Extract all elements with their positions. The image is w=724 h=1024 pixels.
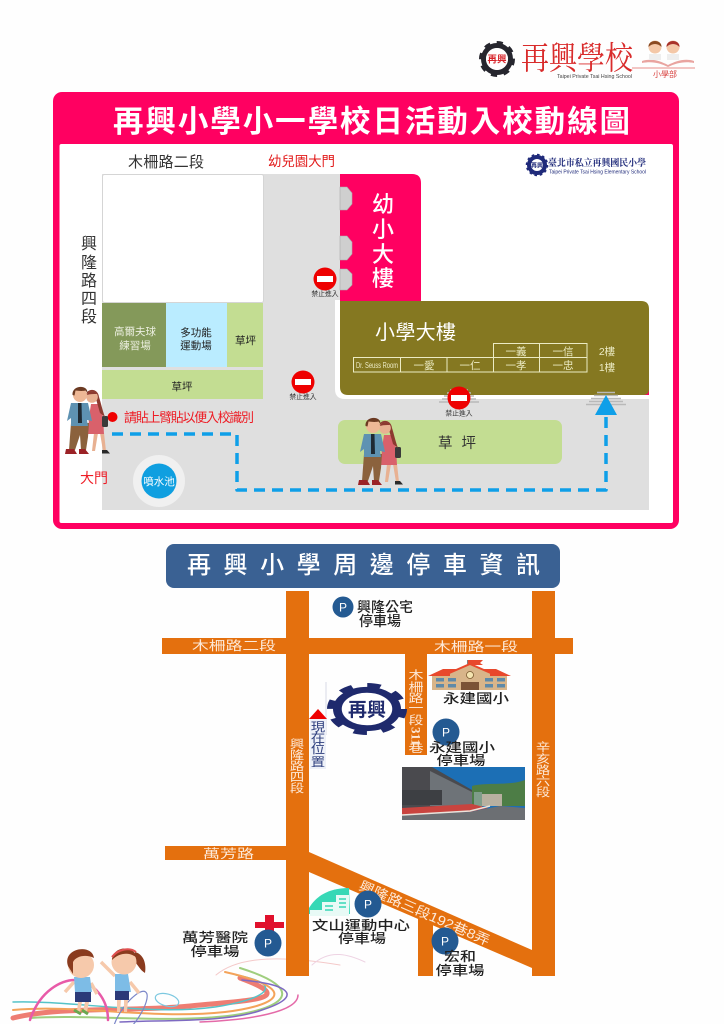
classroom labels: Dr. Seuss Room bbox=[356, 361, 398, 370]
icon: Wenshan sports center building bbox=[309, 888, 350, 916]
red bullet note: 請貼上臂貼以便入校識別 bbox=[124, 410, 254, 425]
school seal and name: 臺北市私立再興國民小學 bbox=[548, 157, 646, 169]
road label: lane 311 vertical: 木柵路一段 bbox=[409, 669, 423, 727]
classroom labels: 一信 bbox=[552, 346, 574, 358]
road: Xinglong Road diagonal lane bbox=[309, 852, 532, 968]
parking: Yongjian elementary bbox=[429, 718, 495, 768]
classroom table bbox=[354, 344, 587, 372]
classroom labels: 一愛 bbox=[414, 359, 434, 372]
icon: gear logo bbox=[481, 43, 513, 75]
classroom labels: 一仁 bbox=[460, 360, 480, 372]
parking: Honghe: P bbox=[441, 934, 449, 948]
people at gate bbox=[65, 387, 110, 454]
department label: 小學部 bbox=[653, 69, 677, 79]
main gate label: 大門 bbox=[80, 470, 108, 486]
current location marker: 現在位置 bbox=[311, 720, 325, 769]
parking: Wenshan sports center bbox=[312, 890, 410, 946]
road: Xinhai Road sec 6 bbox=[532, 591, 555, 976]
parking: Wanfang hospital bbox=[182, 930, 282, 959]
parking: Wenshan sports center: P bbox=[364, 898, 372, 912]
icon: elementary school building bbox=[428, 660, 511, 690]
stairs: front door bbox=[439, 390, 479, 402]
parking: Wanfang hospital: P bbox=[264, 936, 272, 950]
no entry sign 3 bbox=[445, 386, 473, 418]
no entry sign 1 bbox=[311, 268, 339, 298]
white walkway around building bbox=[335, 300, 649, 399]
parking: Wenshan sports center: 文山運動中心 bbox=[312, 918, 410, 933]
road: Xinglong Road sec 4 bbox=[286, 591, 309, 976]
parking street map bbox=[162, 591, 573, 978]
lawn front: 草坪 bbox=[438, 435, 476, 452]
school seal and name: Taipei Private Tsai Hsing Elementary School bbox=[549, 170, 646, 176]
lawn small bbox=[227, 303, 263, 367]
no entry sign 2: 禁止進入 bbox=[289, 392, 317, 401]
lawn wide bbox=[102, 370, 263, 399]
current location marker bbox=[309, 682, 327, 769]
English school name: Taipei Private Tsai Hsing School bbox=[557, 74, 632, 80]
lawn small: 草坪 bbox=[235, 334, 256, 347]
school seal and name bbox=[527, 155, 646, 176]
campus ground bbox=[102, 174, 649, 510]
icon: Tsai Hsing gear logo: 再興 bbox=[348, 699, 386, 721]
kindergarten building bbox=[340, 174, 421, 302]
road label: Muzha Road sec 2: 木柵路二段 bbox=[128, 154, 204, 171]
school seal and name: 再興 bbox=[531, 162, 543, 170]
road label: Muzha Road sec 2: 木柵路二段 bbox=[192, 638, 276, 653]
boy bbox=[65, 949, 97, 1014]
panel interior bbox=[60, 144, 673, 523]
fountain: 噴水池 bbox=[143, 475, 175, 488]
parking: Yongjian elementary: 永建國小 bbox=[429, 740, 495, 755]
classroom labels: 一義 bbox=[506, 345, 527, 358]
parking: Xinglong public housing bbox=[332, 596, 413, 629]
sports: golf practice bbox=[102, 303, 166, 367]
parking: Xinglong public housing: 停車場 bbox=[359, 613, 401, 629]
road label: Xinglong Road sec 4: 興隆路四段 bbox=[81, 235, 97, 326]
sports: golf practice: 高爾夫球 bbox=[114, 325, 156, 338]
route dashed line bbox=[112, 416, 606, 490]
ribbon bbox=[13, 954, 365, 1024]
sports: multipurpose court: 多功能 bbox=[180, 326, 212, 339]
classroom labels: 一孝 bbox=[506, 360, 526, 372]
parking: Honghe: 停車場 bbox=[436, 963, 484, 978]
hoops bbox=[30, 980, 108, 1020]
parking: Honghe bbox=[432, 928, 484, 978]
decorative ribbon and children bbox=[13, 948, 365, 1024]
stairs: entrance bbox=[586, 392, 626, 404]
road: branch lane bbox=[418, 915, 433, 976]
parking: Wenshan sports center: 停車場 bbox=[338, 931, 386, 946]
road: Wanfang Road bbox=[165, 846, 286, 860]
primary building name: 小學大樓 bbox=[375, 321, 456, 344]
road label: lane 311 vertical bbox=[408, 669, 424, 755]
icon: hospital cross bbox=[255, 915, 284, 937]
road label: Muzha Road sec 1: 木柵路一段 bbox=[434, 639, 518, 654]
photo: school parking lot bbox=[402, 767, 525, 820]
road: Muzha Road east-west bbox=[162, 638, 573, 654]
kindergarten gate label: 幼兒園大門 bbox=[268, 154, 335, 169]
parking: Yongjian elementary: 停車場 bbox=[436, 753, 486, 768]
primary school building bbox=[340, 301, 649, 395]
logo: Tsai Hsing school header bbox=[481, 40, 695, 80]
fountain bbox=[133, 455, 185, 507]
classroom labels: 1樓 bbox=[599, 361, 616, 374]
sports: multipurpose court bbox=[166, 303, 227, 367]
parking: Yongjian elementary: P bbox=[442, 726, 450, 740]
road label: Xinhai vertical: 辛亥路六段 bbox=[536, 740, 550, 799]
arrow: route end bbox=[595, 395, 617, 415]
no entry sign 2 bbox=[289, 370, 317, 401]
people on route bbox=[358, 418, 403, 485]
road label: lane 311 vertical: 巷 bbox=[409, 742, 423, 755]
classroom labels bbox=[356, 345, 616, 374]
sports: golf practice: 練習場 bbox=[119, 339, 151, 352]
road label: Wanfang Road: 萬芳路 bbox=[203, 846, 255, 861]
kindergarten stairs bbox=[340, 187, 352, 290]
heading: parking information banner bbox=[166, 544, 560, 588]
school name calligraphy: 再興學校 bbox=[521, 40, 634, 76]
panel frame bbox=[53, 92, 679, 529]
empty plot bbox=[102, 174, 264, 302]
panel: campus route map bbox=[53, 92, 679, 529]
classroom labels: 一忠 bbox=[552, 360, 574, 372]
road label: Xinglong vertical: 興隆路四段 bbox=[290, 737, 304, 795]
icon: Tsai Hsing gear logo bbox=[332, 686, 402, 732]
parking: Wanfang hospital: 萬芳醫院 bbox=[182, 930, 248, 945]
no entry sign 3: 禁止進入 bbox=[445, 408, 473, 418]
icon: children reading bbox=[632, 40, 695, 68]
heading: parking information banner: 再興小學周邊停車資訊 bbox=[187, 552, 540, 579]
label: Yongjian elementary: 永建國小 bbox=[443, 691, 509, 706]
classroom labels: 2樓 bbox=[599, 345, 616, 358]
icon: gear logo: 再興 bbox=[487, 54, 507, 66]
parking: Honghe: 宏和 bbox=[444, 949, 476, 964]
road label: lane 311 vertical: 311 bbox=[408, 727, 424, 746]
sports: multipurpose court: 運動場 bbox=[180, 339, 212, 352]
lawn front bbox=[338, 420, 562, 464]
road: Muzha Road lane 311 bbox=[405, 654, 427, 755]
road label: diagonal lane: 興隆路三段192巷8弄 bbox=[357, 878, 492, 948]
parking: Xinglong public housing: 興隆公宅 bbox=[357, 599, 413, 615]
corner accent bbox=[640, 385, 649, 395]
girl bbox=[101, 948, 145, 1012]
lawn wide: 草坪 bbox=[172, 380, 193, 393]
title: 再興小學小一學校日活動入校動線圖 bbox=[113, 105, 630, 139]
kindergarten building name: 幼小大樓 bbox=[372, 192, 394, 291]
parking: Wanfang hospital: 停車場 bbox=[190, 944, 240, 959]
parking: Xinglong public housing: P bbox=[339, 600, 347, 614]
no entry sign 1: 禁止進入 bbox=[311, 289, 339, 298]
